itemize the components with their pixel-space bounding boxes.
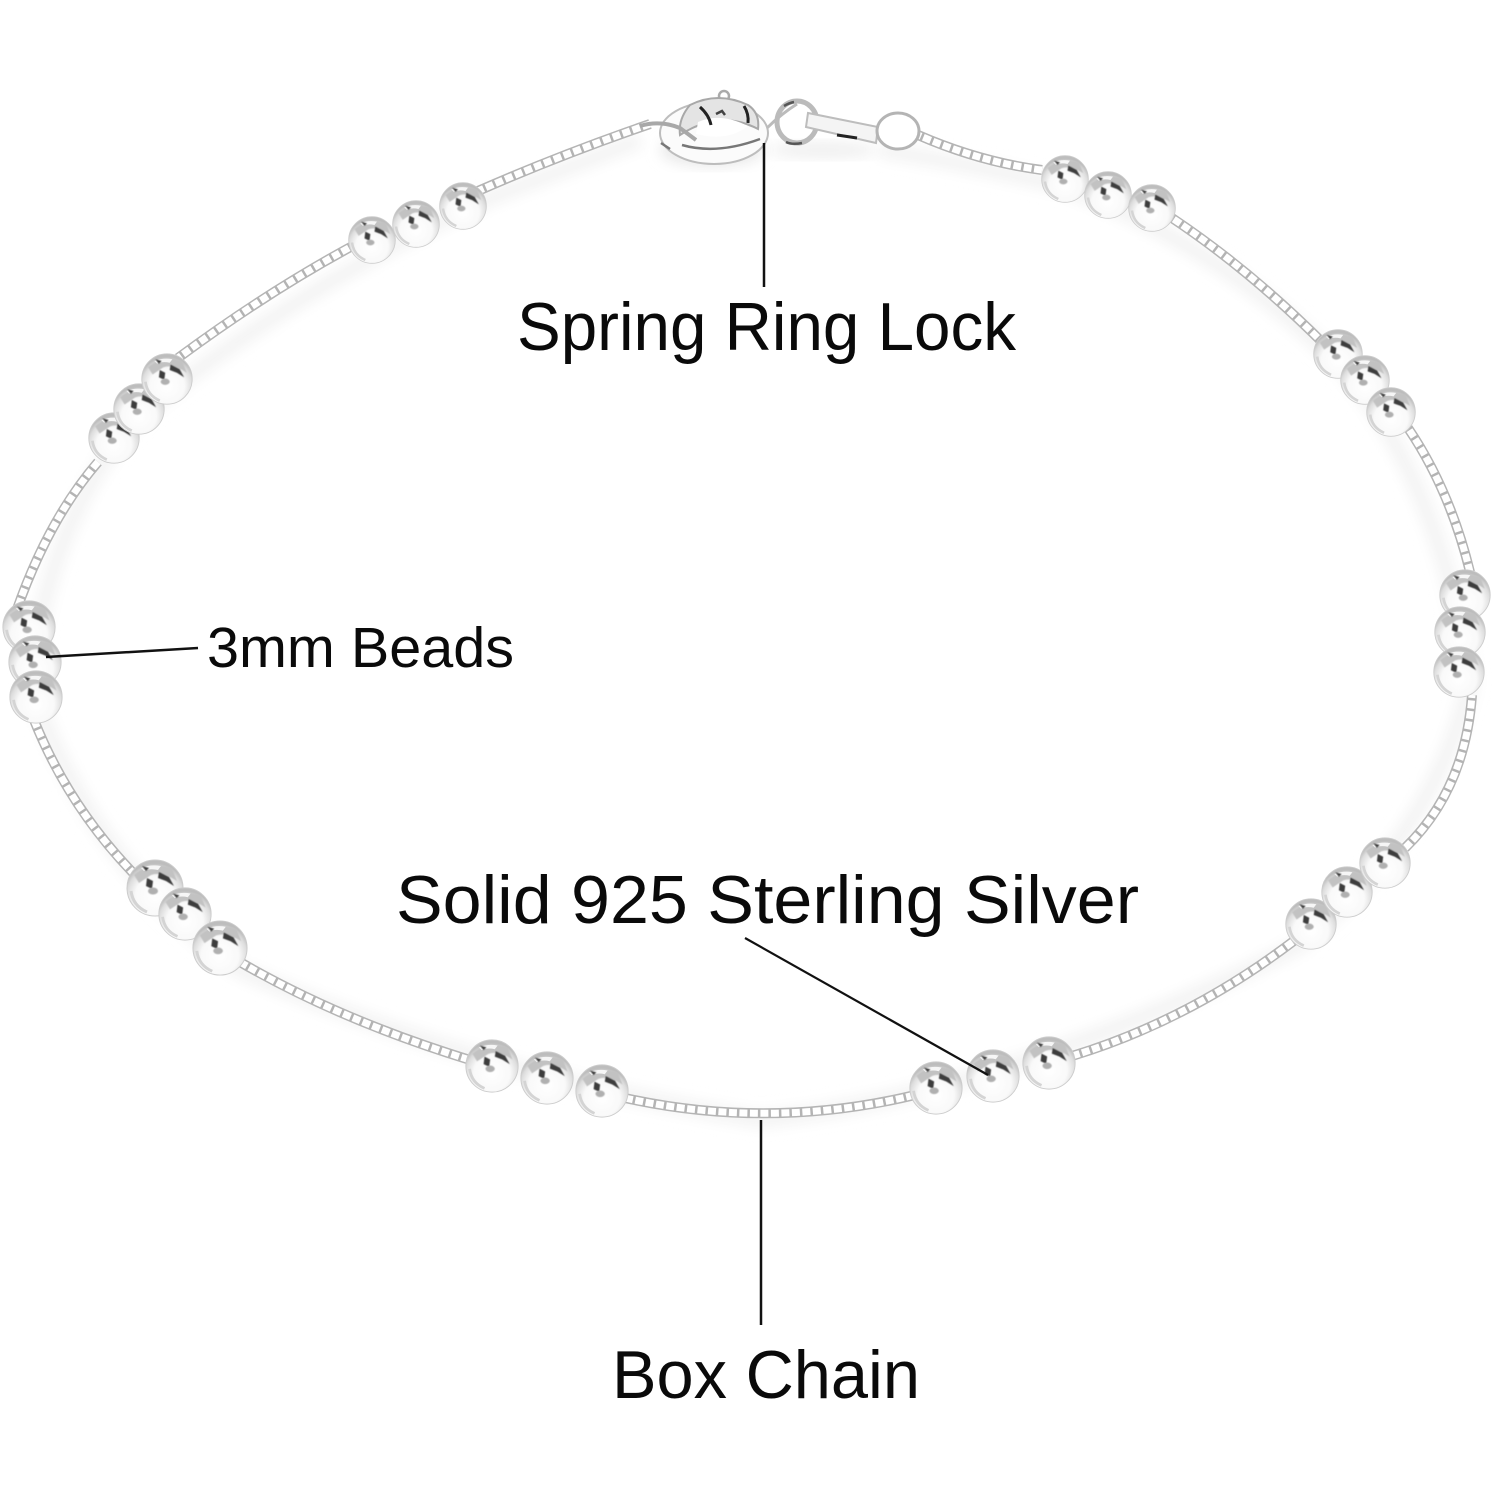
bead group: bottom left [466,1040,628,1117]
bead group: upper left [89,354,192,463]
label: 3mm Beads: 3mm Beads [207,616,514,680]
bead group: upper right [1314,330,1415,436]
soft shadow under bracelet [30,140,1470,1120]
bead group: lower left [127,860,247,975]
bead group: left, 3mm beads [3,601,62,723]
leader line: box chain [760,1120,762,1325]
leader line: spring ring lock [763,143,765,287]
box chain [16,124,1472,1113]
bead group: right [1434,570,1490,697]
label: Spring Ring Lock: Spring Ring Lock [517,289,1017,365]
bead group: top right [1042,156,1175,231]
spring ring clasp [640,91,919,166]
label: Box Chain: Box Chain [612,1337,920,1413]
bead group: lower right [1286,838,1410,949]
bead group: top left [349,183,486,263]
leader line: 3mm beads [46,648,198,657]
label: Solid 925 Sterling Silver: Solid 925 Sterling Silver [396,862,1139,938]
bead group: bottom right [910,1037,1075,1114]
leader line: sterling silver [745,938,988,1075]
